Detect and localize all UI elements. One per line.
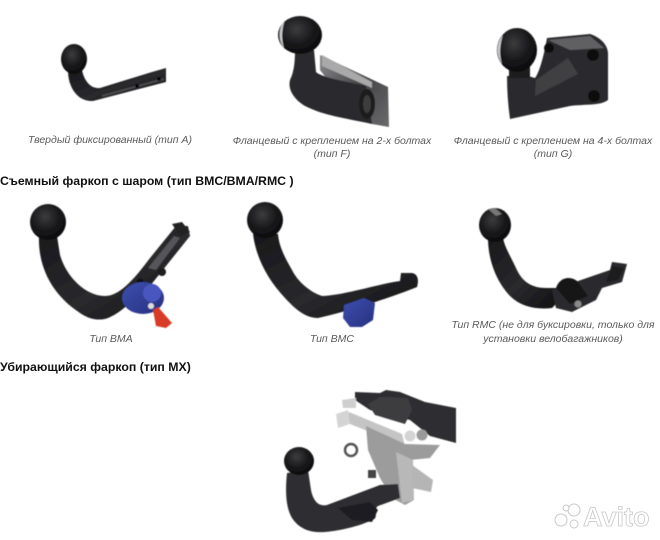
caption: type A: Твердый фиксированный (тип А) <box>28 134 192 146</box>
caption: type BMC: Тип BMC <box>310 333 354 345</box>
heading: retractable towbar: Убирающийся фаркоп (тип MX) <box>0 360 191 374</box>
panel: fixed towbars <box>28 16 653 160</box>
icon: detachable towbar type RMC <box>479 208 627 312</box>
caption: type BMA: Тип BMA <box>89 333 133 345</box>
icon: detachable towbar type BMA <box>30 204 190 328</box>
caption: type G: (тип G) <box>534 148 572 160</box>
icon: flange towbar type F <box>278 16 389 127</box>
caption: type RMC: Тип RMC (не для буксировки, только для <box>451 319 655 331</box>
panel: detachable towbars <box>30 202 655 345</box>
caption: type RMC: установки велобагажников) <box>482 333 623 345</box>
icon: fixed towbar type A <box>61 44 166 101</box>
caption: type G: Фланцевый с креплением на 4-х болтах <box>454 135 653 147</box>
caption: type F: Фланцевый с креплением на 2-х болтах <box>233 135 432 147</box>
icon: flange towbar type G <box>497 28 608 119</box>
icon: detachable towbar type BMC <box>247 202 418 327</box>
caption: type F: (тип F) <box>314 148 350 160</box>
label: Avito: Avito <box>583 502 650 532</box>
icon: retractable towbar type MX <box>284 390 456 532</box>
watermark: Avito logo <box>555 502 650 532</box>
heading: detachable towbar: Съемный фаркоп с шаром (тип BMC/BMA/RMC ) <box>0 174 294 188</box>
icon: Avito dots <box>555 504 580 528</box>
